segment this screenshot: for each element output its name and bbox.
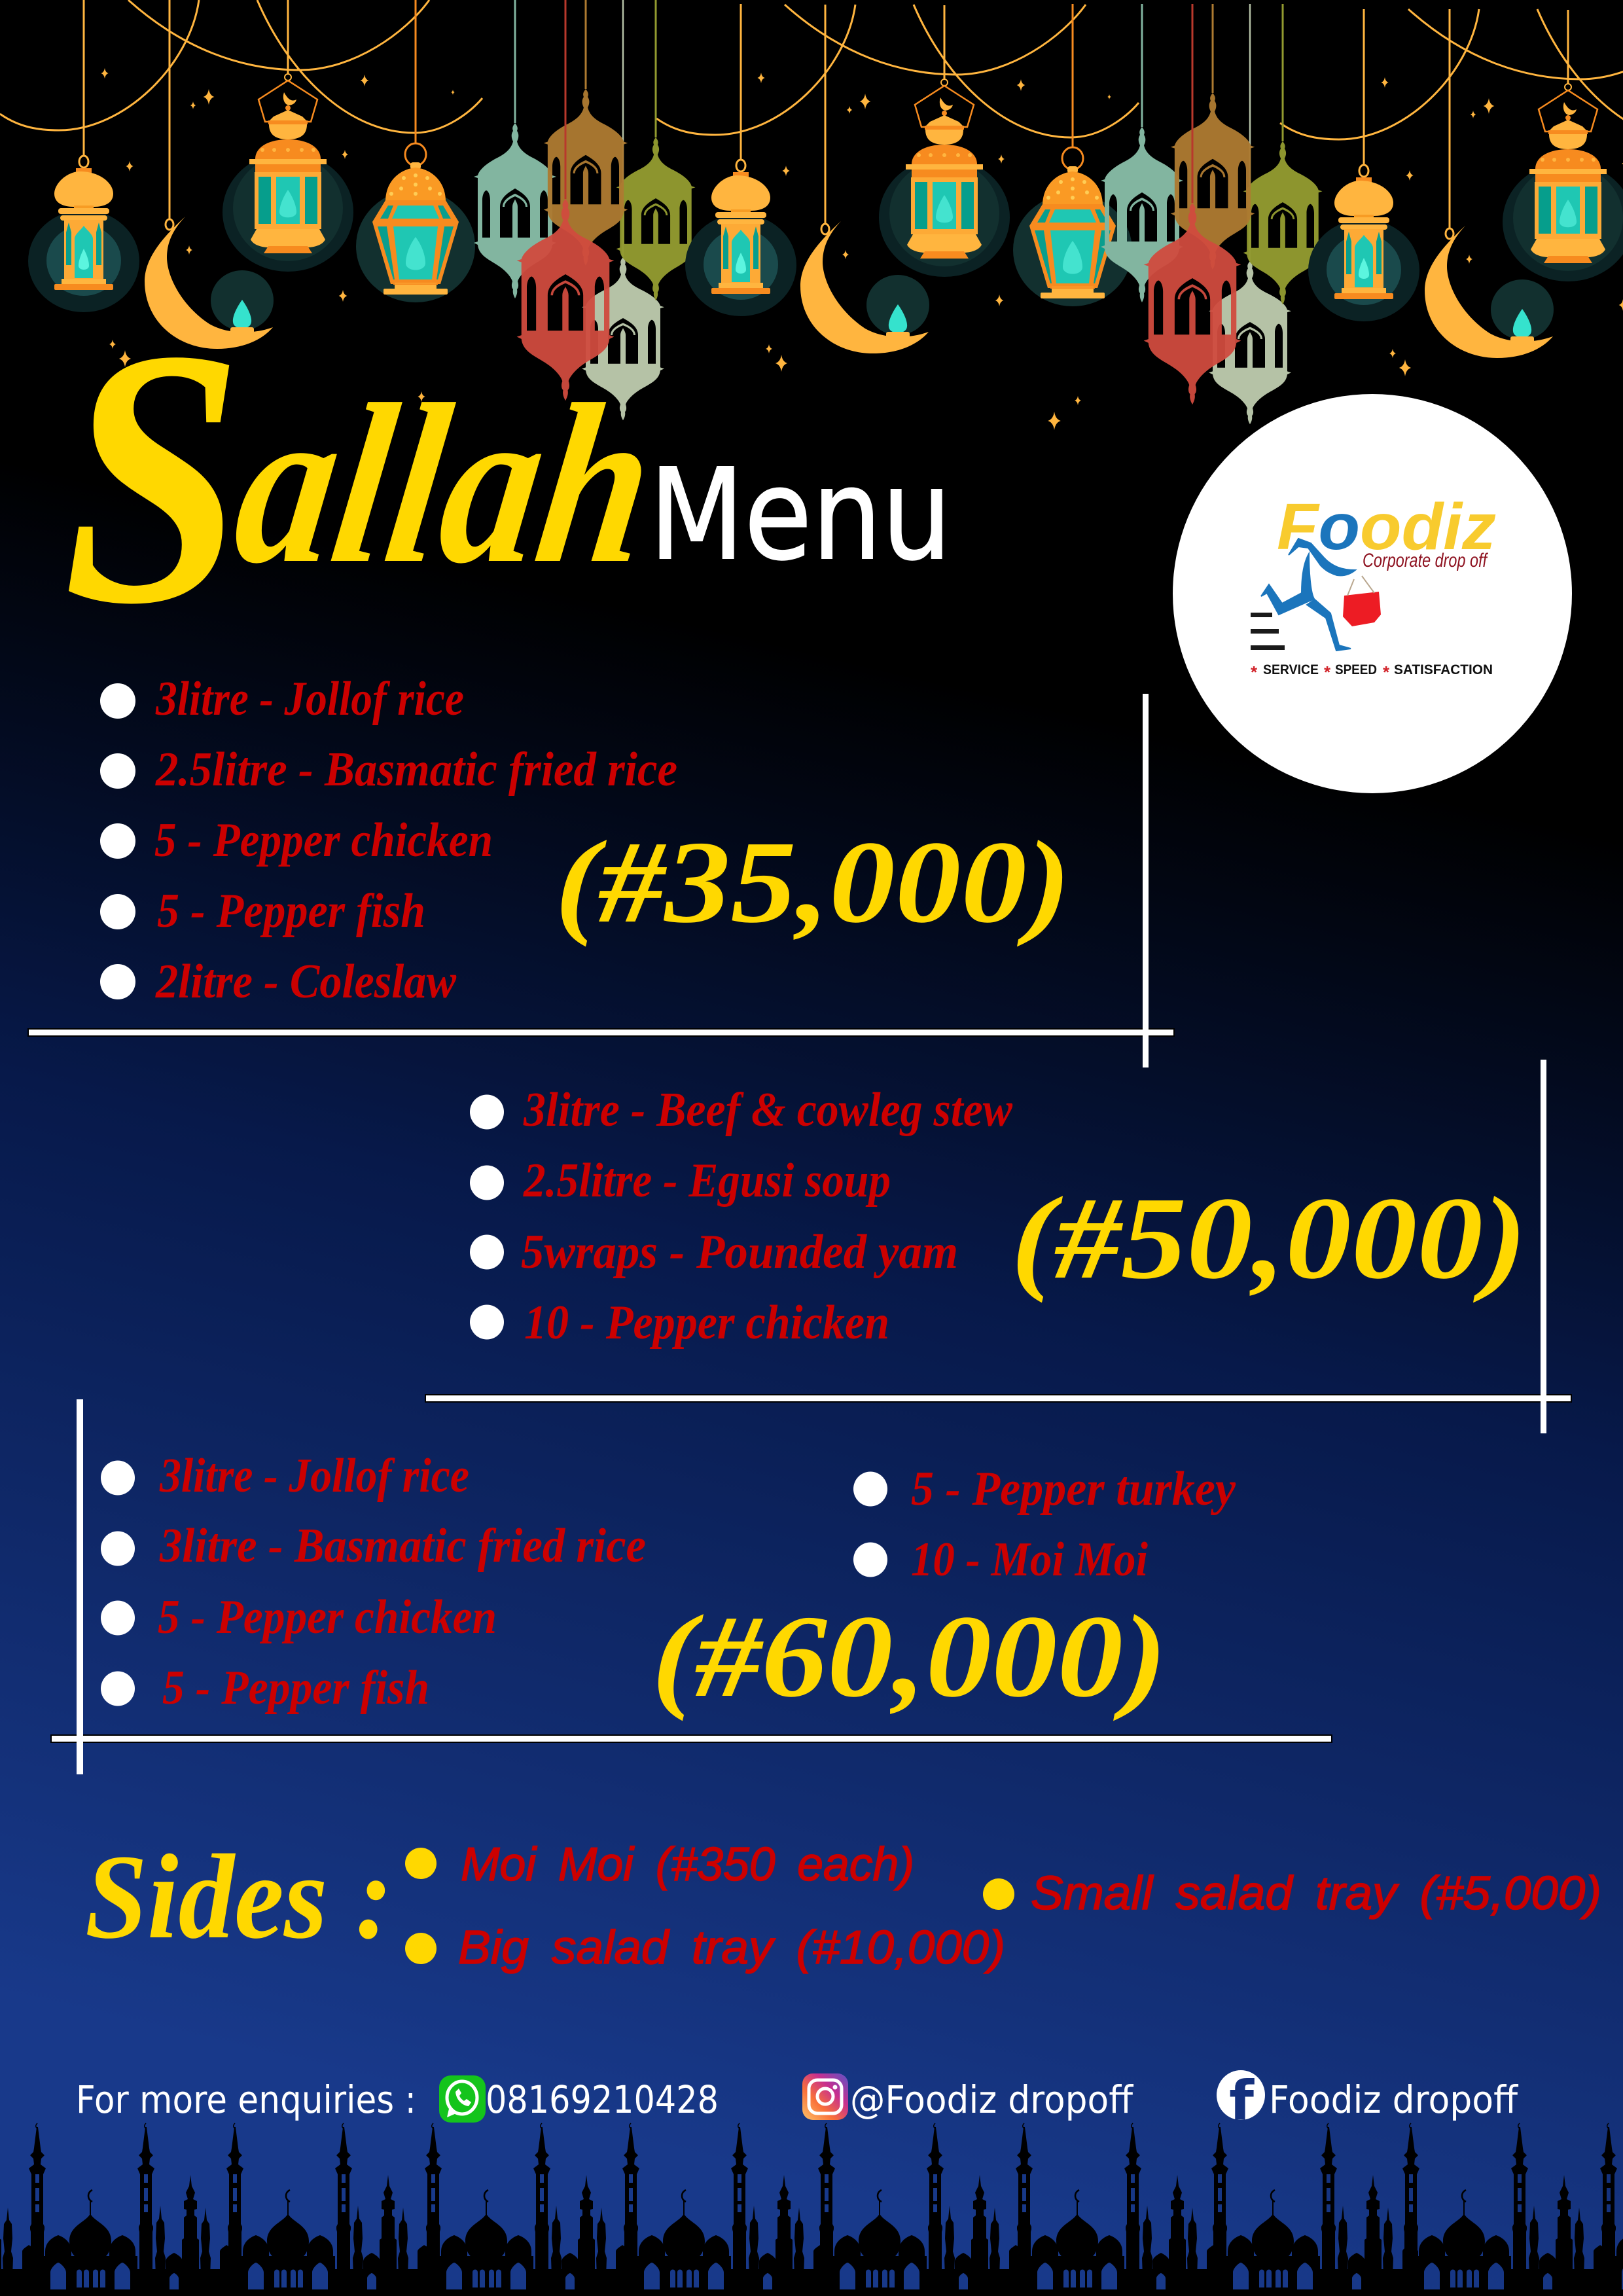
item list 2: 2.5litre - Egusi soup — [523, 1154, 891, 1208]
item list 1 — [154, 672, 677, 1009]
hanging curved strings — [0, 0, 1623, 142]
instagram handle: @Foodiz dropoff — [850, 2077, 1134, 2122]
sides list: Big salad tray (#10,000) — [458, 1922, 1005, 1974]
lantern: small dome right — [1308, 9, 1419, 321]
mosque skyline — [0, 2123, 1623, 2296]
item list 1: 2.5litre - Basmatic fried rice — [155, 743, 677, 797]
phone number: 08169210428 — [486, 2077, 719, 2122]
item list 2 — [521, 1083, 1013, 1350]
bullets 1 — [100, 683, 135, 999]
coloured lantern cluster left — [474, 0, 695, 420]
logo tagline: SATISFACTION — [1394, 662, 1493, 677]
sides section — [85, 1830, 1601, 1974]
enquiries label: For more enquiries : — [76, 2077, 416, 2122]
lantern: tall centre — [879, 5, 1010, 277]
item list 3: 10 - Moi Moi — [911, 1533, 1148, 1587]
coloured lantern cluster right — [1101, 4, 1322, 424]
crescent centre — [800, 5, 929, 353]
logo tagline: * — [1251, 662, 1258, 682]
icon: instagram — [802, 2073, 848, 2120]
facebook handle: Foodiz dropoff — [1269, 2077, 1519, 2122]
logo speed lines — [1251, 613, 1285, 650]
logo subtitle: Corporate drop off — [1363, 550, 1488, 571]
item list 1: 5 - Pepper fish — [157, 884, 425, 938]
item list 3: 3litre - Jollof rice — [159, 1449, 469, 1503]
crescent left — [145, 0, 274, 349]
logo tagline: SERVICE — [1263, 662, 1319, 677]
lantern: small dome left — [28, 0, 139, 312]
item list 2: 10 - Pepper chicken — [524, 1296, 889, 1350]
price 3: (#60,000) — [652, 1591, 1167, 1721]
item list 1: 2litre - Coleslaw — [155, 955, 457, 1009]
item list 2: 5wraps - Pounded yam — [521, 1225, 958, 1279]
icon: facebook: f — [1229, 2069, 1255, 2133]
logo tagline — [1251, 662, 1493, 682]
footer contacts — [76, 2069, 1519, 2133]
icon: facebook — [1217, 2069, 1265, 2133]
item list 1: 3litre - Jollof rice — [155, 672, 464, 726]
crescent right — [1425, 9, 1554, 358]
title: S — [63, 274, 243, 680]
item list 3: 5 - Pepper chicken — [158, 1590, 497, 1644]
title — [63, 274, 952, 680]
sides list: Small salad tray (#5,000) — [1031, 1867, 1601, 1920]
title: Menu — [649, 442, 952, 588]
item list 3: 5 - Pepper fish — [162, 1661, 429, 1715]
lantern: small dome centre — [685, 4, 796, 316]
rules 1 — [27, 694, 1175, 1067]
sides list: Moi Moi (#350 each) — [461, 1839, 914, 1891]
lantern: hexagonal left — [356, 0, 475, 302]
sparkle stars — [101, 68, 1623, 430]
menu package 1 — [27, 672, 1175, 1067]
logo tagline: * — [1383, 662, 1390, 682]
price 1: (#35,000) — [555, 817, 1071, 947]
logo tagline: SPEED — [1335, 662, 1377, 677]
title: allah — [223, 358, 668, 611]
sides list — [458, 1839, 1601, 1974]
item list 3 — [158, 1449, 1236, 1715]
bullets 3 — [101, 1461, 887, 1706]
item list 3: 3litre - Basmatic fried rice — [159, 1519, 646, 1573]
sides bullets — [405, 1848, 1014, 1964]
logo runner figure — [1261, 539, 1355, 651]
item list 3: 5 - Pepper turkey — [911, 1462, 1236, 1516]
menu package 2 — [425, 1060, 1572, 1433]
menu package 3 — [50, 1399, 1332, 1774]
icon: whatsapp — [439, 2075, 486, 2123]
price 2: (#50,000) — [1011, 1173, 1527, 1303]
lantern: tall left — [223, 0, 353, 272]
item list 2: 3litre - Beef & cowleg stew — [523, 1083, 1013, 1137]
logo badge — [1173, 394, 1572, 793]
rules 3 — [50, 1399, 1332, 1774]
bullets 2 — [470, 1094, 504, 1339]
item list 1: 5 - Pepper chicken — [154, 814, 493, 867]
logo tagline: * — [1324, 662, 1331, 682]
sides heading: Sides : — [85, 1830, 393, 1964]
lantern: hexagonal centre — [1013, 4, 1132, 306]
logo wordmark: Foodiz — [1277, 490, 1496, 564]
logo bag — [1343, 576, 1381, 626]
rules 2 — [425, 1060, 1572, 1433]
lantern: tall right — [1503, 10, 1623, 281]
